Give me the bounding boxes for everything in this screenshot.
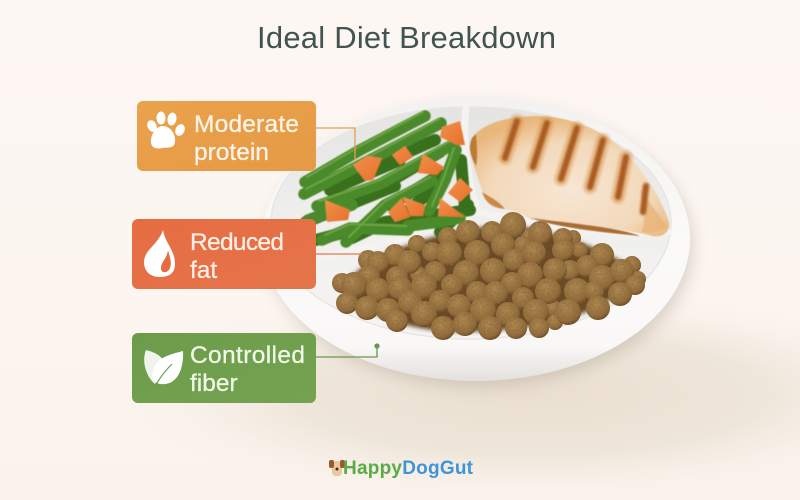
- connector: fat: [316, 253, 362, 255]
- label: controlled fiber: fiber: [190, 370, 238, 397]
- label: moderate protein: Moderate: [194, 111, 299, 138]
- kibble: [332, 212, 646, 340]
- label: reduced fat: fat: [190, 257, 217, 284]
- green beans: [304, 112, 470, 242]
- icon: dog: [329, 460, 345, 476]
- carrots: [325, 121, 473, 222]
- card: reduced fat: [132, 219, 316, 289]
- plate: [262, 97, 693, 387]
- label: controlled fiber: Controlled: [190, 342, 305, 369]
- icon: leaves: [144, 350, 183, 389]
- title: Ideal Diet Breakdown: [257, 20, 556, 55]
- plate dividers: [300, 108, 668, 262]
- grill marks: [505, 121, 646, 212]
- logo text: HappyDogGut: [343, 458, 474, 479]
- grilled chicken breast: [470, 116, 669, 236]
- icon: paw: [145, 112, 187, 148]
- label: reduced fat: Reduced: [190, 229, 284, 256]
- connector: fiber: [316, 344, 379, 357]
- card: controlled fiber: [132, 333, 316, 403]
- green beans and carrots: [304, 112, 473, 242]
- icon: fat drop: [144, 230, 175, 277]
- label: moderate protein: [194, 111, 299, 166]
- card: moderate protein: [137, 101, 316, 171]
- label: controlled fiber: [190, 342, 305, 397]
- connector: protein: [316, 128, 355, 160]
- label: reduced fat: [190, 229, 284, 284]
- label: moderate protein: protein: [194, 139, 269, 166]
- logo: [329, 458, 474, 479]
